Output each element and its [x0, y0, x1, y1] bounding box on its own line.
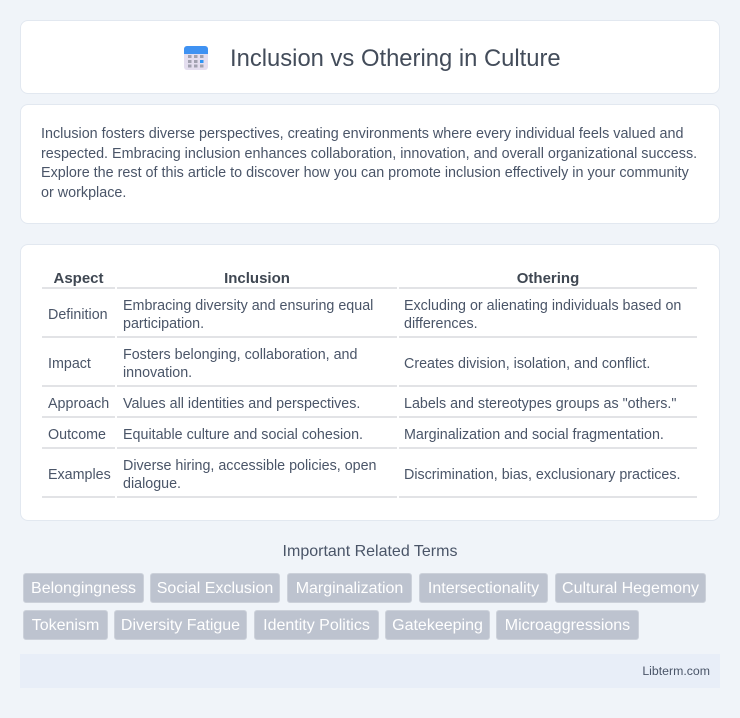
- footer credit: Libterm.com: [642, 664, 710, 678]
- comparison table: Equitable culture and social cohesion.: [123, 427, 363, 443]
- related terms tags: Microaggressions: [505, 617, 630, 634]
- comparison table: Excluding or alienating individuals based on: [404, 298, 681, 314]
- related terms tags: Social Exclusion: [157, 580, 273, 597]
- row: approach: Approach: [48, 396, 109, 412]
- intro text: Explore the rest of this article to discover how you can promote inclusion effectively in your community: [41, 165, 689, 181]
- intro text: or workplace.: [41, 184, 126, 200]
- related terms tags: [23, 573, 706, 640]
- title: Inclusion vs Othering in Culture: [230, 45, 561, 72]
- related terms tags: Cultural Hegemony: [562, 580, 699, 597]
- intro text: respected. Embracing inclusion enhances collaboration, innovation, and overall organizational success.: [41, 146, 697, 162]
- comparison table: innovation.: [123, 365, 192, 381]
- icon: calendar: [184, 46, 208, 70]
- comparison table: dialogue.: [123, 476, 181, 492]
- related terms tags: Diversity Fatigue: [121, 617, 240, 634]
- related terms heading: Important Related Terms: [283, 543, 457, 560]
- row: impact: Impact: [48, 356, 91, 372]
- footer: [20, 654, 720, 688]
- table header: Aspect: [53, 270, 104, 287]
- comparison table: participation.: [123, 316, 204, 332]
- related terms tags: Intersectionality: [428, 580, 539, 597]
- related terms tags: Marginalization: [296, 580, 403, 597]
- comparison table: Fosters belonging, collaboration, and: [123, 347, 357, 363]
- header card: [20, 20, 720, 94]
- comparison table: Marginalization and social fragmentation.: [404, 427, 664, 443]
- related terms tags: Belongingness: [31, 580, 136, 597]
- comparison table: [42, 270, 697, 498]
- comparison table: Othering: [517, 270, 579, 287]
- comparison table: Inclusion: [224, 270, 290, 287]
- related terms tags: Tokenism: [32, 617, 99, 634]
- row: outcome: Outcome: [48, 427, 106, 443]
- intro text: Inclusion fosters diverse perspectives, creating environments where every individual feels valued and: [41, 126, 684, 142]
- row: definition: Definition: [48, 307, 108, 323]
- intro text: [41, 126, 697, 200]
- table card: [20, 244, 720, 521]
- comparison table: Values all identities and perspectives.: [123, 396, 360, 412]
- comparison table: differences.: [404, 316, 478, 332]
- comparison table: Discrimination, bias, exclusionary practices.: [404, 467, 681, 483]
- row: examples: Examples: [48, 467, 111, 483]
- intro card: [20, 104, 720, 224]
- comparison table: Labels and stereotypes groups as "others.": [404, 396, 676, 412]
- comparison table: Creates division, isolation, and conflict.: [404, 356, 650, 372]
- related terms tags: Identity Politics: [263, 617, 370, 634]
- comparison table: Diverse hiring, accessible policies, open: [123, 458, 376, 474]
- related terms tags: Gatekeeping: [392, 617, 483, 634]
- comparison table: Embracing diversity and ensuring equal: [123, 298, 373, 314]
